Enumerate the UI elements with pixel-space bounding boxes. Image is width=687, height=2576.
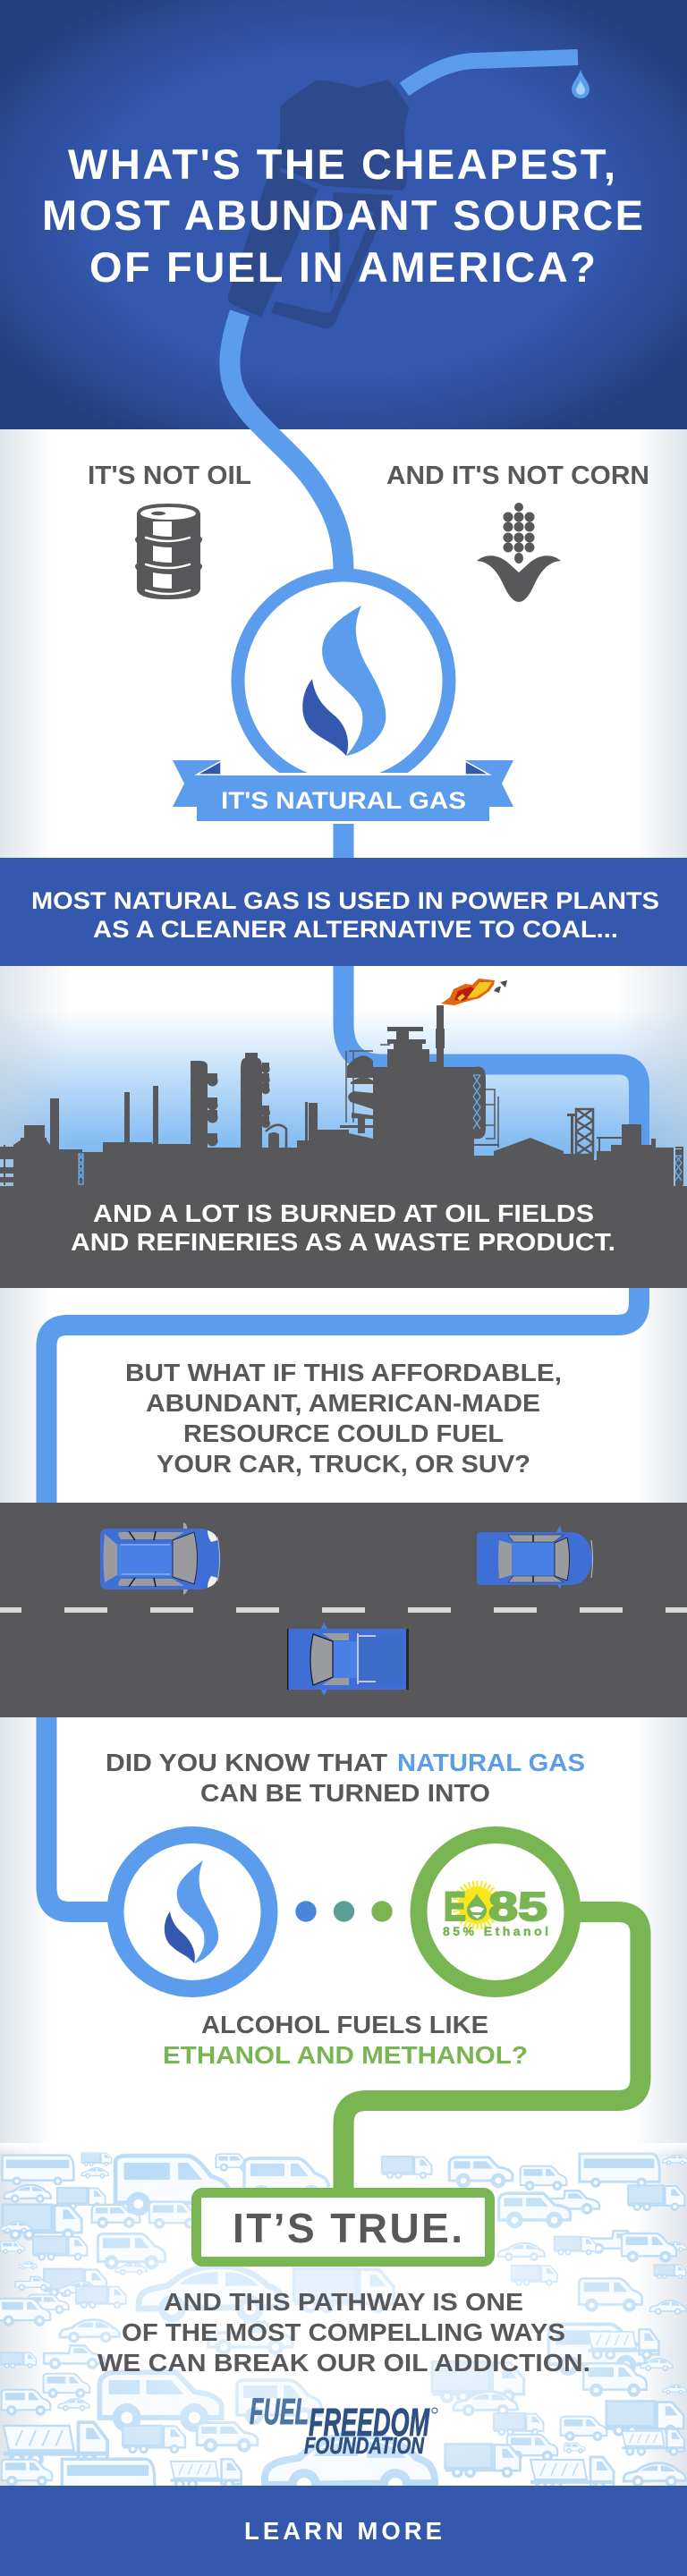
text: this pathway: AND THIS PATHWAY IS ONE [164,2288,523,2316]
background pattern: vehicles [0,2143,687,2501]
arrow: blue fuel hose path [47,313,639,1912]
ribbon: it's natural gas: IT'S NATURAL GAS [221,787,466,814]
icon: fuel drop [572,70,589,98]
text: but what if: BUT WHAT IF THIS AFFORDABLE, [125,1359,562,1386]
panel: learn more band: LEARN MORE [244,2517,442,2545]
callout: it's true: IT’S TRUE. [233,2205,462,2251]
icon: fuel nozzle spout [404,57,578,89]
text: this pathway [98,2288,590,2377]
text: did you know: NATURAL GAS [397,1749,585,1776]
text: but what if: ABUNDANT, AMERICAN-MADE [146,1389,540,1417]
panel: waste product band text: AND REFINERIES AS A WASTE PRODUCT. [71,1228,615,1256]
arrow: green hose path [344,1912,640,2191]
logo: Fuel Freedom Foundation: FREEDOM [309,2401,430,2445]
icon: natural gas flame [302,606,386,756]
text: this pathway: OF THE MOST COMPELLING WAYS [122,2318,565,2346]
panel: fuel pump sky gradient [0,966,687,1190]
text: and it's not corn: AND IT'S NOT CORN [386,462,649,490]
icon: E85 ethanol circle: 85% Ethanol [443,1924,548,1938]
panel: waste product band text: AND A LOT IS BURNED AT OIL FIELDS [93,1199,594,1227]
icon: E85 ethanol circle: 85 [488,1884,547,1929]
text: did you know: DID YOU KNOW THAT [106,1749,387,1776]
text: but what if [125,1359,562,1478]
text: but what if: YOUR CAR, TRUCK, OR SUV? [157,1450,530,1478]
text: it's not oil: IT'S NOT OIL [88,462,251,490]
icon: natural gas circle [115,1835,269,1989]
icon: corn [477,503,561,602]
panel: learn more band [0,2486,687,2576]
logo: Fuel Freedom Foundation: FUEL [250,2391,309,2432]
panel: waste product band text [71,1199,615,1256]
panel: power plants band: AS A CLEANER ALTERNATIVE TO COAL... [93,916,618,943]
heading: main title [42,140,643,291]
illustration: refinery silhouette [0,1005,687,1288]
text: this pathway: WE CAN BREAK OUR OIL ADDICTION. [98,2349,590,2377]
panel: road [0,1503,687,1717]
ribbon: it's natural gas [173,760,513,824]
heading: main title: WHAT'S THE CHEAPEST, [68,140,615,188]
icon: blue pickup truck [287,1623,409,1696]
icon: blue hatchback [100,1522,220,1595]
panel: power plants band: MOST NATURAL GAS IS USED IN POWER PLANTS [31,887,659,914]
icon: three dots [295,1901,393,1922]
panel: power plants band [0,858,687,966]
refinery lattice details [79,1075,682,1184]
icon: oil barrel [135,504,202,599]
heading: main title: OF FUEL IN AMERICA? [89,243,596,291]
text: alcohol fuels [163,2011,528,2069]
text: did you know: CAN BE TURNED INTO [200,1779,490,1807]
icon: gas flare flame [441,979,507,1005]
heading: main title: MOST ABUNDANT SOURCE [42,191,643,239]
side vignettes [0,429,687,2487]
text: alcohol fuels: ALCOHOL FUELS LIKE [201,2011,488,2038]
logo: Fuel Freedom Foundation [250,2391,437,2459]
text: but what if: RESOURCE COULD FUEL [183,1419,504,1447]
icon: blue sedan [477,1525,592,1589]
text: alcohol fuels: ETHANOL AND METHANOL? [163,2041,528,2069]
text: did you know [106,1749,585,1807]
panel: header background [0,0,687,429]
callout: it's true [197,2193,490,2261]
icon: E85 ethanol circle [419,1835,572,1989]
icon: fuel nozzle body [228,80,409,329]
icon: natural gas ring [238,575,449,786]
icon: E85 ethanol circle: E [444,1884,466,1929]
logo: Fuel Freedom Foundation: FOUNDATION [304,2432,425,2459]
